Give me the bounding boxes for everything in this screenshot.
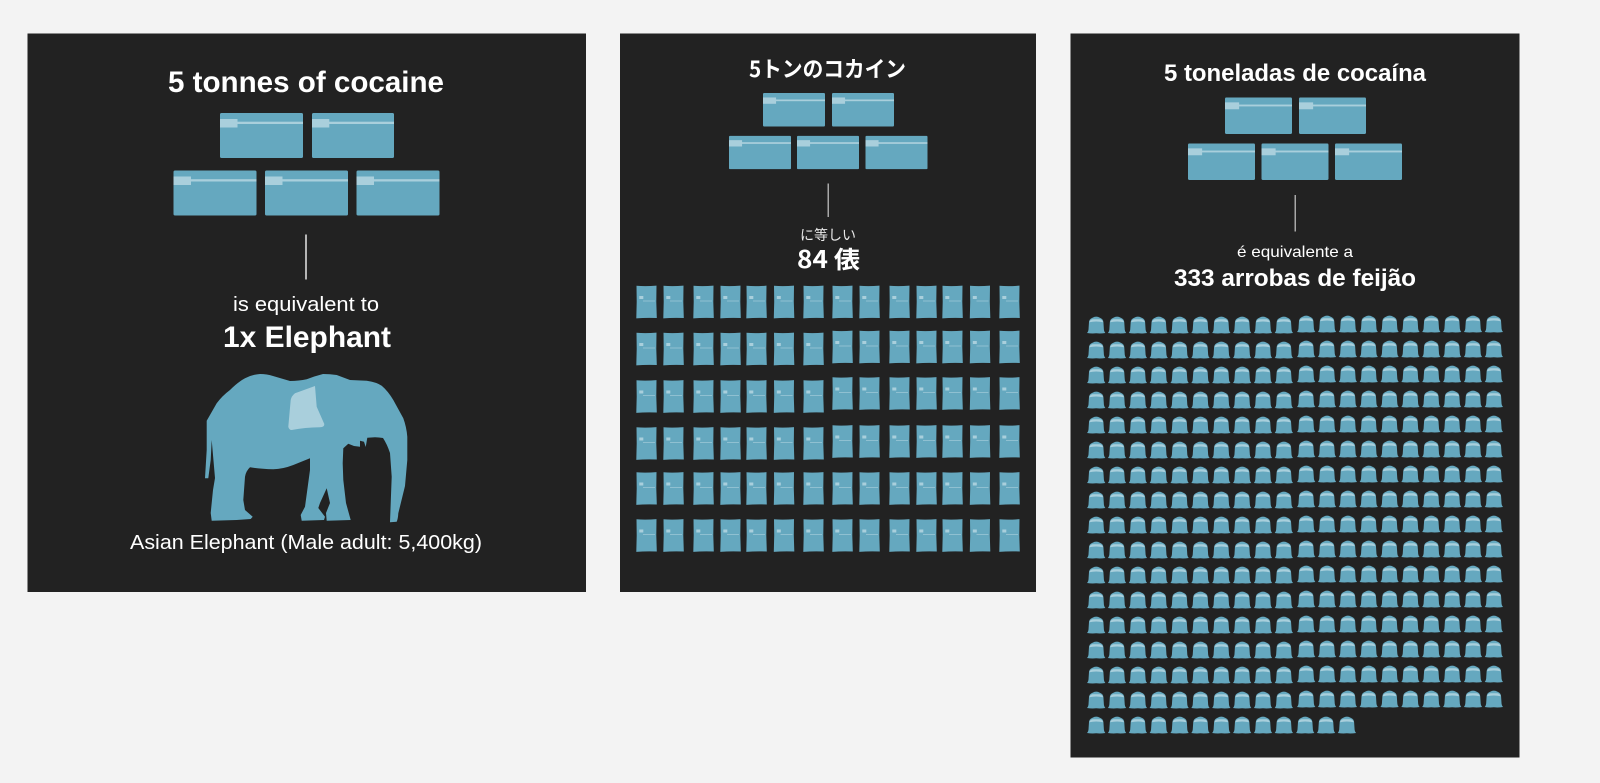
icon grid: 333 bean sacks bbox=[1087, 316, 1503, 733]
icon: five cocaine bricks bbox=[729, 93, 928, 169]
panel: Japanese rice bale comparison bbox=[620, 34, 1036, 592]
caption: Asian Elephant weight: Asian Elephant (Male adult: 5,400kg) bbox=[130, 532, 482, 554]
heading: 5 tonnes of cocaine: 5 tonnes of cocaine bbox=[168, 66, 444, 99]
heading: 5 tonnes of cocaine in Portuguese: 5 toneladas de cocaína bbox=[1164, 60, 1427, 87]
icon: five cocaine bricks bbox=[174, 113, 440, 216]
connector line bbox=[828, 184, 829, 217]
heading: 5 tons of cocaine in Japanese: 5トンのコカイン bbox=[749, 52, 906, 84]
text: is equivalent to, in Portuguese: é equivalente a bbox=[1237, 244, 1353, 261]
text: 84 bales: 84 俵 bbox=[797, 240, 860, 275]
icon: five cocaine bricks bbox=[1188, 98, 1402, 180]
text: 1x Elephant: 1x Elephant bbox=[223, 321, 391, 354]
panel: Portuguese bean sack comparison bbox=[1070, 34, 1520, 758]
text: is equivalent to: is equivalent to bbox=[233, 294, 379, 316]
connector line bbox=[1294, 195, 1296, 232]
panel: English elephant comparison bbox=[28, 34, 586, 592]
text: equal to, in Japanese: に等しい bbox=[800, 225, 856, 245]
connector line bbox=[305, 234, 307, 280]
icon: elephant silhouette bbox=[205, 374, 407, 522]
text: 333 arrobas of beans: 333 arrobas de feijão bbox=[1174, 265, 1416, 292]
icon grid: 84 rice bales bbox=[636, 286, 1020, 552]
